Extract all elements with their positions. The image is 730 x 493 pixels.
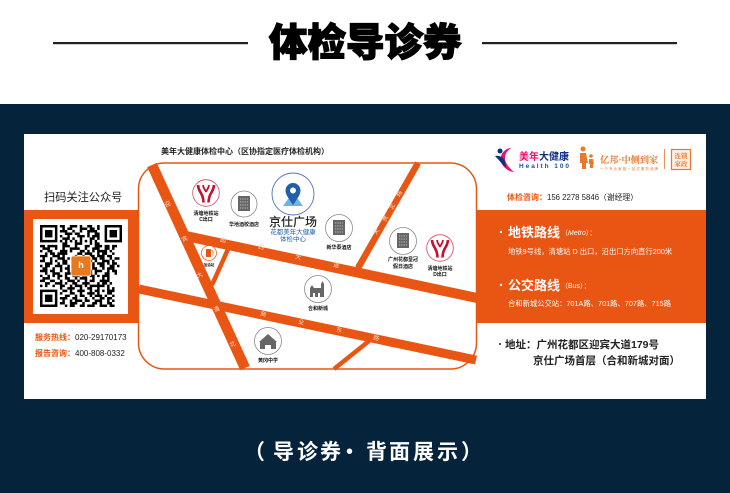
road labels: 贵 <box>380 214 390 223</box>
logo: Health 100: Health 100 <box>519 163 569 170</box>
road labels: 路 <box>372 333 380 343</box>
voucher card <box>24 134 706 399</box>
logo: Yibang family icon <box>580 146 690 171</box>
road labels: 宾 <box>180 234 189 244</box>
panel: map <box>138 146 477 369</box>
icon: school building: 黄冈中学 <box>258 357 278 364</box>
road labels: 大 <box>294 252 302 262</box>
logo wordmark: 亿邦·中侧到家 <box>600 152 658 166</box>
chain housekeeping badge: 家政 <box>674 159 688 168</box>
chain housekeeping badge <box>672 150 690 170</box>
map heading: 美年大健康体检中心（区协指定医疗体检机构） <box>161 146 329 156</box>
icon: hotel building 1: 华地酒校酒店 <box>229 221 259 228</box>
icon: hotel building 3: 广州花都皇冠 <box>388 256 418 263</box>
logo: Health 100: 美年大健康 <box>519 150 569 163</box>
icon: metro station C exit: C出口 <box>199 216 213 223</box>
title text: 体检导诊券 <box>269 12 462 68</box>
panel: QR code section <box>33 190 128 358</box>
service hotline <box>35 332 127 342</box>
road labels: 北 <box>228 339 237 349</box>
icon: hotel building 2: 新华泰酒店 <box>326 244 352 251</box>
QR heading: 扫码关注公众号 <box>44 190 122 204</box>
phone enquiry <box>507 192 638 202</box>
service hotline: 服务热线： <box>35 332 75 342</box>
logo: Health 100 <box>495 148 569 172</box>
road labels: 商 <box>259 309 267 319</box>
road labels: 北 <box>387 202 397 211</box>
icon: Hehe New Town castle: 合和新城 <box>308 305 328 312</box>
road labels: 大 <box>195 270 204 280</box>
road labels: 园 <box>219 236 227 245</box>
metro route <box>500 225 673 256</box>
metro route: 地铁路线 <box>508 225 560 240</box>
report enquiry line: 400-808-0332 <box>75 349 125 358</box>
road labels: 路 <box>394 189 404 198</box>
icon: Hehe New Town castle <box>304 276 332 312</box>
navy background band <box>0 104 730 493</box>
icon: metro station C exit: 清塘地铁站 <box>193 210 219 217</box>
address: 地址：广州花都区迎宾大道179号 <box>505 338 659 351</box>
chain housekeeping badge: 连锁 <box>674 151 688 160</box>
orange band <box>24 210 706 323</box>
bus route: 合和新城公交站：701A路、701路、707路、715路 <box>508 299 672 308</box>
icon: school building <box>254 328 282 364</box>
bus route: 公交路线 <box>508 278 560 293</box>
road labels: 东 <box>335 325 343 335</box>
report enquiry line <box>35 348 125 358</box>
bus route: （Bus）： <box>561 282 591 290</box>
icon: metro station D exit <box>427 235 453 278</box>
panel: transit directions <box>500 225 673 308</box>
phone enquiry: 体检咨询： <box>507 192 547 202</box>
icon: metro station D exit: 清塘地铁站 <box>427 265 453 272</box>
road labels: 天 <box>372 227 381 236</box>
address <box>499 338 680 367</box>
icon: hotel building 1 <box>229 191 259 228</box>
caption: （导诊券·背面展示） <box>244 436 482 466</box>
metro route: （Metro）： <box>561 229 596 237</box>
icon: hotel building 2 <box>326 214 352 251</box>
icon: hotel building 3: 假日酒店 <box>393 263 413 270</box>
icon: location pin for Jingshi Plaza: 体检中心 <box>280 234 306 243</box>
panel: logos <box>495 146 690 202</box>
address: 京仕广场首层（合和新城对面） <box>533 354 680 367</box>
roads <box>139 163 477 369</box>
report enquiry line: 报告咨询： <box>35 348 75 358</box>
QR centre logo: h <box>78 260 84 270</box>
icon: metro station C exit <box>193 180 219 223</box>
icon: hotel building 3 <box>388 228 418 270</box>
location name: 京仕广场 <box>269 214 317 229</box>
metro route: 地铁9号线，清塘站 D 出口，沿出口方向直行200米 <box>508 247 673 256</box>
road labels: 道 <box>212 304 221 314</box>
logo: Yibang family icon: 一个专业家庭一站式服务品牌 <box>600 166 658 171</box>
road labels: 迎 <box>163 199 172 209</box>
icon: metro station D exit: D出口 <box>433 271 447 278</box>
service hotline: 020-29170173 <box>75 333 127 342</box>
road labels: 道 <box>332 260 340 270</box>
road labels: 西 <box>257 243 265 252</box>
icon: petrol station: 加油站 <box>204 262 215 267</box>
phone enquiry: 156 2278 5846（谢经理） <box>547 192 638 202</box>
road labels: 业 <box>297 317 305 327</box>
icon: location pin for Jingshi Plaza <box>269 173 317 243</box>
road labels <box>163 189 404 349</box>
QR code <box>33 219 128 314</box>
bus route <box>500 278 672 308</box>
icon: petrol station <box>202 246 216 267</box>
location subtitle: 花都美年大健康 <box>270 227 316 236</box>
